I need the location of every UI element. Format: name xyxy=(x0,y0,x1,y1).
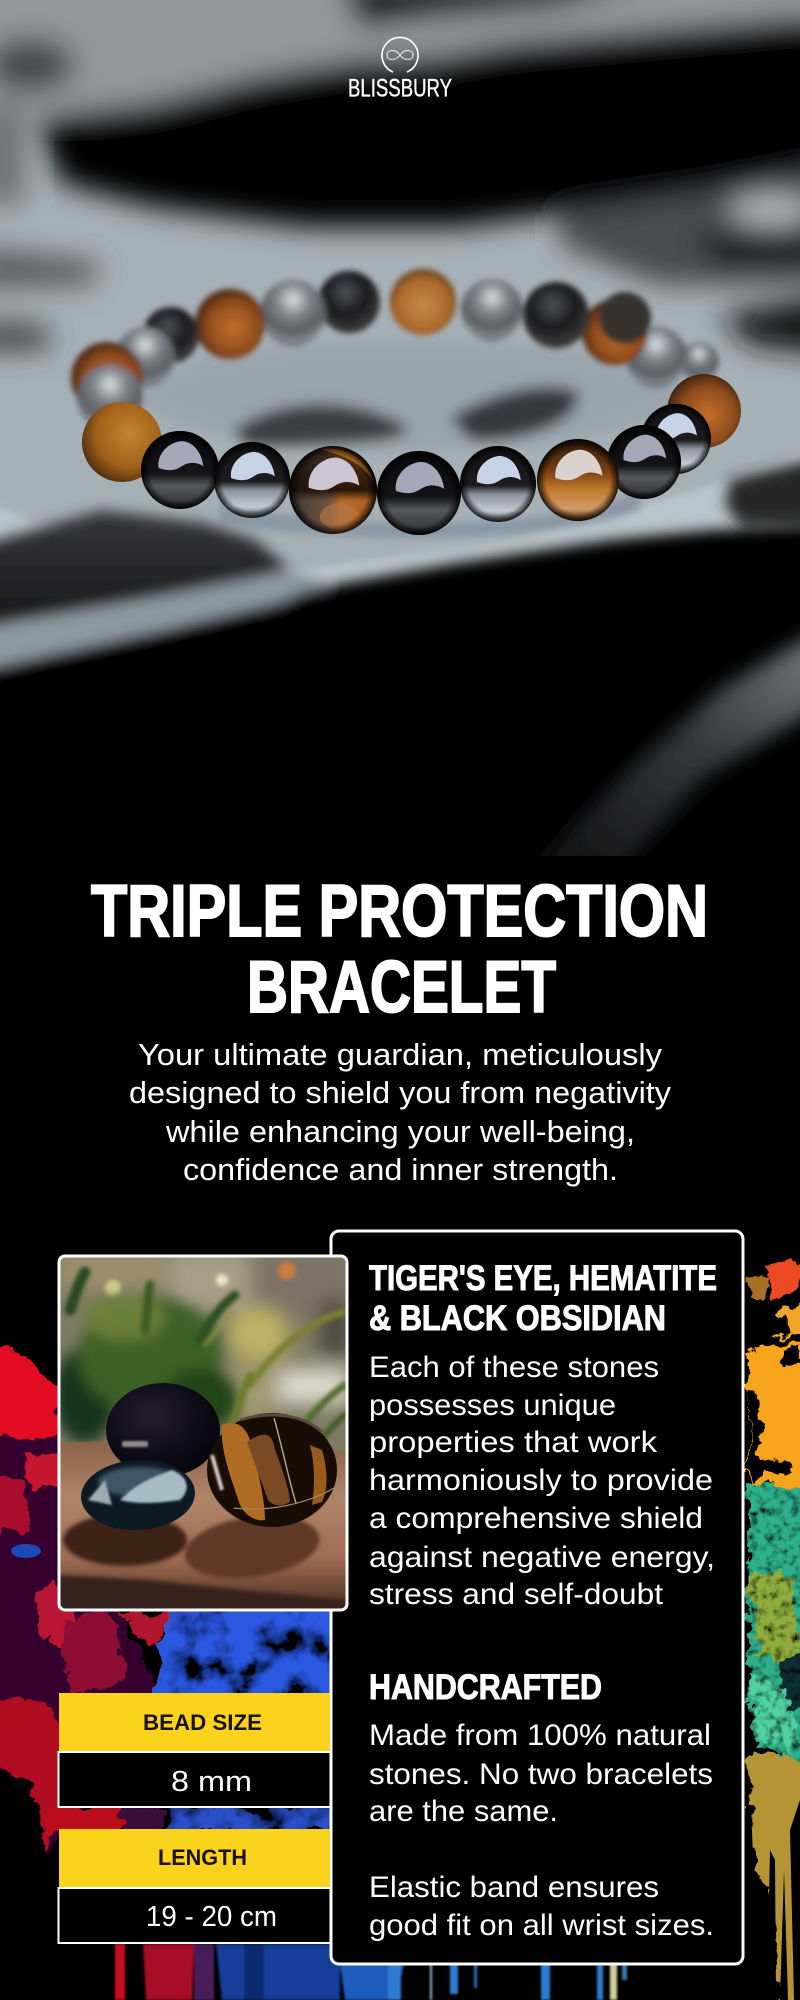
stones body text: stress and self-doubt xyxy=(369,1578,664,1611)
stones body text: possesses unique xyxy=(369,1389,616,1422)
foliage xyxy=(53,1272,345,1443)
photo border xyxy=(59,1256,347,1610)
cloth folds xyxy=(0,0,800,870)
black obsidian stone xyxy=(106,1383,220,1477)
black paint streaks xyxy=(748,1305,800,1480)
spec table: bead size xyxy=(58,1693,330,1807)
handcrafted body text: good fit on all wrist sizes. xyxy=(369,1909,714,1942)
section: handcrafted xyxy=(369,1668,714,1942)
stones heading xyxy=(369,1259,717,1338)
drips under table xyxy=(115,1944,627,2000)
handcrafted body text: Elastic band ensures xyxy=(369,1871,659,1904)
bracelet beads xyxy=(71,269,741,535)
stones body text: properties that work xyxy=(369,1426,658,1459)
length value: 19 - 20 cm xyxy=(146,1901,277,1933)
bead size label xyxy=(59,1693,330,1752)
handcrafted body text: stones. No two bracelets xyxy=(369,1758,713,1791)
rock shadows xyxy=(60,1516,346,1608)
stones heading: & BLACK OBSIDIAN xyxy=(369,1299,666,1338)
tiger's eye stone xyxy=(207,1413,337,1527)
black drips xyxy=(745,1800,800,2000)
photo background xyxy=(60,1258,346,1462)
green paint xyxy=(748,1470,800,1760)
handcrafted heading: HANDCRAFTED xyxy=(369,1668,602,1707)
card panel xyxy=(331,1231,743,1964)
bead size value: 8 mm xyxy=(171,1766,252,1798)
stones heading: TIGER'S EYE, HEMATITE xyxy=(369,1259,717,1298)
stones body text xyxy=(369,1351,715,1611)
stones body text: a comprehensive shield xyxy=(369,1502,703,1535)
logo icon: infinity circle xyxy=(382,37,418,72)
stones body text: harmoniously to provide xyxy=(369,1464,713,1497)
stones body text: against negative energy, xyxy=(369,1541,715,1574)
hematite stone xyxy=(79,1457,197,1533)
logo xyxy=(348,37,452,103)
bead size label: BEAD SIZE xyxy=(143,1710,262,1735)
heading: BRACELET xyxy=(247,947,556,1028)
info card xyxy=(331,1231,743,1964)
spec table: length xyxy=(58,1829,330,1943)
blue paint band xyxy=(150,1604,345,1832)
back row beads xyxy=(71,269,719,431)
paint splash: right orange, green and yellow xyxy=(745,1262,800,2000)
bead size value xyxy=(58,1752,330,1807)
intro text: designed to shield you from negativity xyxy=(129,1075,672,1110)
stones body text: Each of these stones xyxy=(369,1351,659,1384)
orange paint xyxy=(748,1262,800,1490)
intro text: confidence and inner strength. xyxy=(183,1152,618,1187)
stones photo xyxy=(53,1250,350,1612)
intro text: while enhancing your well-being, xyxy=(165,1114,635,1149)
paint splash: left red and blue xyxy=(0,1348,627,2000)
handcrafted body text xyxy=(369,1719,714,1942)
intro text xyxy=(129,1037,672,1187)
blue paint accent xyxy=(11,1544,41,1558)
rock surface xyxy=(59,1440,346,1610)
intro text: Your ultimate guardian, meticulously xyxy=(138,1037,663,1072)
length label xyxy=(59,1829,330,1888)
hero photo: bracelet on dark cloth xyxy=(0,0,800,870)
front row beads xyxy=(82,374,741,535)
handcrafted body text: are the same. xyxy=(369,1795,558,1828)
section: stones xyxy=(369,1259,717,1611)
logo wordmark: BLISSBURY xyxy=(348,74,452,102)
length label: LENGTH xyxy=(158,1845,247,1870)
handcrafted body text: Made from 100% natural xyxy=(369,1719,711,1752)
heading xyxy=(91,871,708,1028)
length value xyxy=(58,1888,330,1943)
